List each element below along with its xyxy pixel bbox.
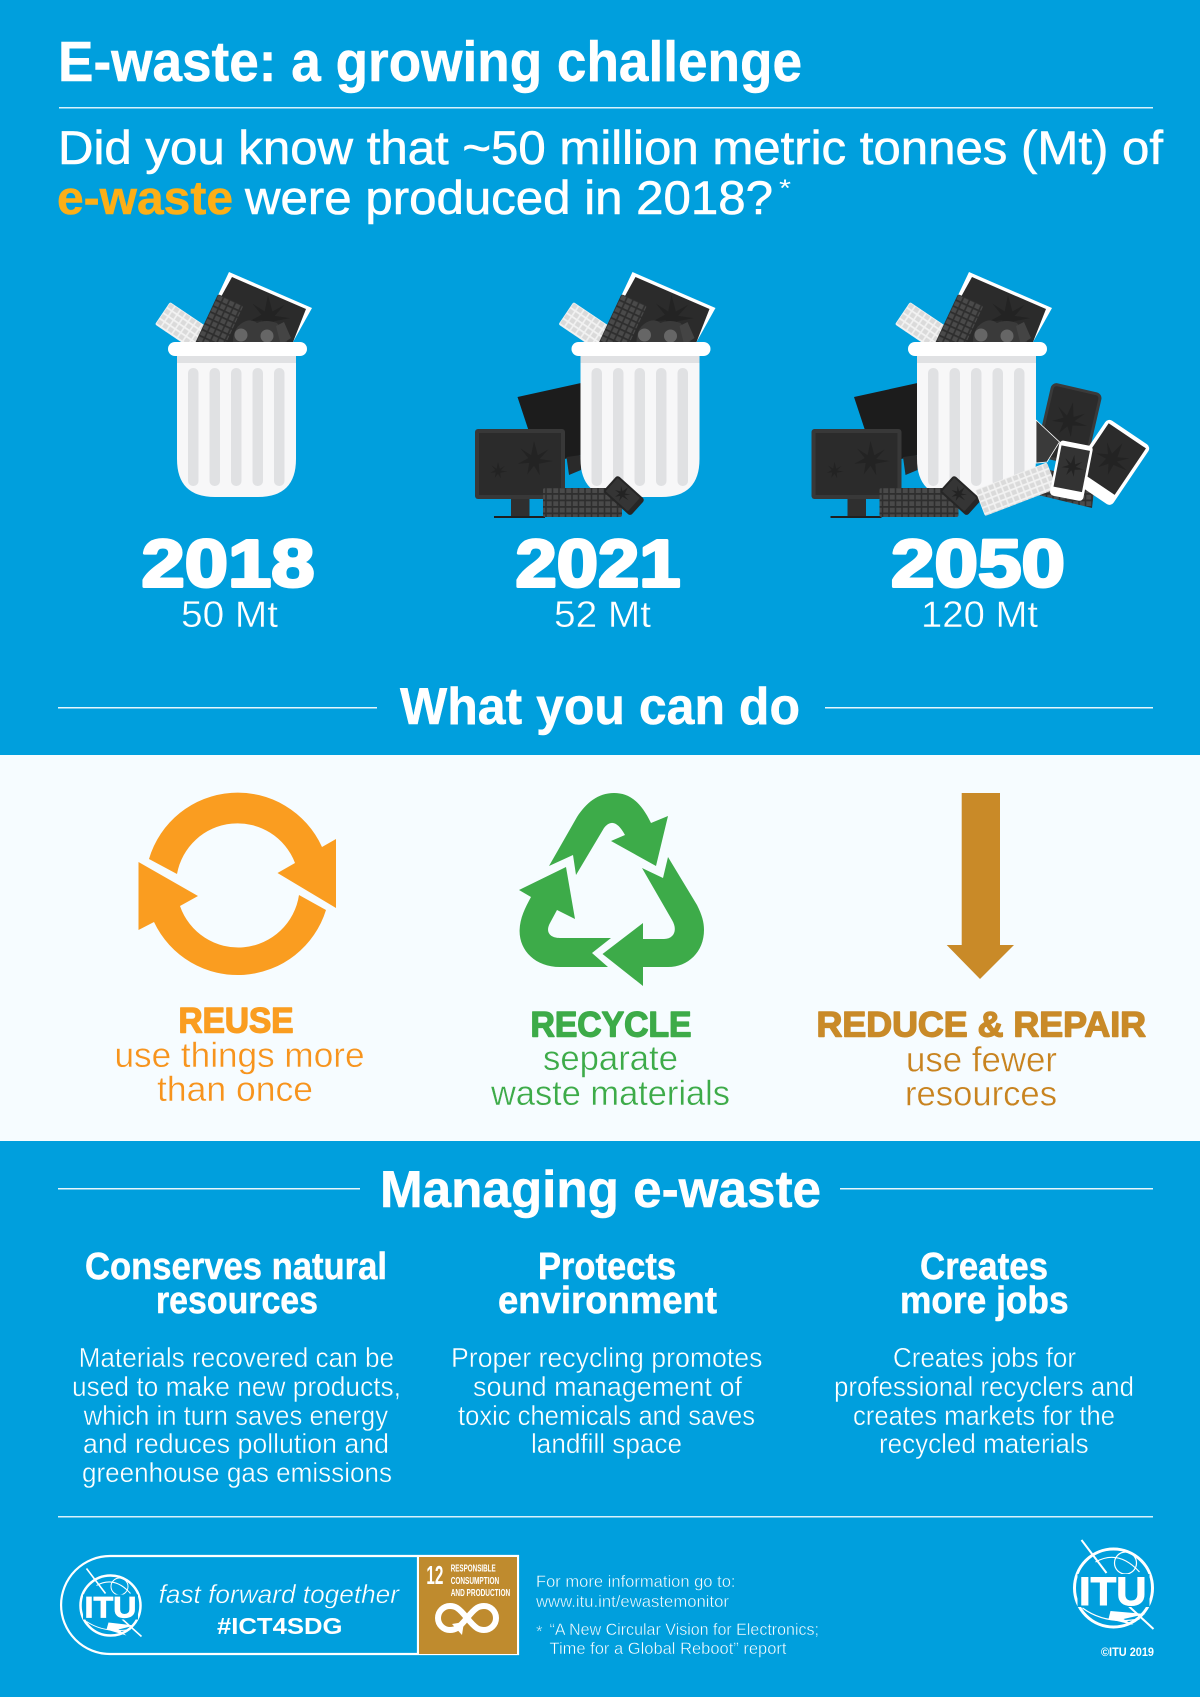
reduce and repair label: REDUCE & REPAIR	[816, 1006, 1146, 1044]
column text	[451, 1342, 762, 1459]
column text: recycled materials	[879, 1428, 1089, 1459]
reduce and repair description: resources	[905, 1074, 1057, 1114]
column text	[834, 1342, 1134, 1459]
icon: white keyboard	[975, 462, 1057, 516]
column text: toxic chemicals and saves	[458, 1400, 755, 1431]
SDG 12 square: 12	[426, 1560, 443, 1590]
SDG 12 square: RESPONSIBLE	[451, 1563, 496, 1575]
icon: trash bin 2018	[155, 272, 312, 497]
column heading	[900, 1246, 1069, 1322]
panel: actions band	[0, 755, 1200, 1141]
column text: landfill space	[531, 1428, 682, 1459]
year 2018: 2018	[142, 526, 314, 602]
recycle description: waste materials	[490, 1074, 730, 1113]
SDG 12 square: CONSUMPTION	[451, 1575, 499, 1587]
copyright: ©ITU 2019	[1101, 1647, 1154, 1659]
column text: which in turn saves energy	[83, 1400, 388, 1431]
icon: small tablet	[1036, 420, 1060, 463]
icon: white phone	[1049, 440, 1093, 501]
icon: ITU logo small: ITU	[84, 1592, 136, 1624]
footer badge	[61, 1556, 518, 1654]
panel: 2018	[142, 272, 314, 635]
reuse label: REUSE	[178, 1002, 294, 1040]
icon: white tablet	[1068, 418, 1151, 507]
title: E-waste: a growing challenge	[58, 30, 802, 94]
subtitle	[57, 121, 1164, 224]
icon: ITU logo small	[80, 1568, 142, 1636]
column text: professional recyclers and	[834, 1371, 1134, 1402]
subtitle: *	[779, 175, 791, 202]
subtitle: Did you know that ~50 million metric tonnes (Mt) of	[58, 121, 1164, 174]
more information text	[535, 1572, 736, 1611]
hashtag: #ICT4SDG	[217, 1613, 342, 1639]
value 50 Mt: 50 Mt	[181, 594, 279, 635]
more information text: For more information go to:	[536, 1572, 736, 1591]
footnote: *	[536, 1622, 543, 1641]
column heading	[498, 1246, 717, 1322]
column text: and reduces pollution and	[83, 1428, 389, 1459]
heading: managing e-waste: Managing e-waste	[380, 1161, 821, 1219]
reduce and repair description	[905, 1040, 1057, 1114]
icon: ITU logo large	[1074, 1540, 1154, 1629]
footnote: “A New Circular Vision for Electronics;	[550, 1620, 819, 1639]
icon: overflowing trash bin 2050	[812, 272, 1151, 518]
column heading	[85, 1246, 387, 1322]
panel: reduce and repair	[816, 793, 1146, 1114]
value 120 Mt: 120 Mt	[921, 594, 1039, 635]
icon: trash bin with e-waste pile 2021	[475, 272, 716, 518]
column heading: environment	[498, 1280, 717, 1322]
slogan: fast forward together	[159, 1579, 400, 1609]
footnote: Time for a Global Reboot” report	[550, 1639, 787, 1658]
column text: creates markets for the	[853, 1400, 1115, 1431]
reuse description	[114, 1036, 364, 1109]
footnote	[536, 1620, 819, 1658]
reuse description: than once	[157, 1070, 313, 1109]
column text: Creates jobs for	[893, 1342, 1076, 1373]
more information text: www.itu.int/ewastemonitor	[535, 1592, 729, 1611]
column: creates more jobs	[834, 1246, 1134, 1459]
reuse description: use things more	[114, 1036, 364, 1075]
SDG 12 square: AND PRODUCTION	[451, 1587, 510, 1599]
icon: down arrow	[947, 793, 1014, 979]
recycle description	[490, 1039, 730, 1113]
column text: sound management of	[473, 1371, 742, 1402]
column heading: Protects	[538, 1246, 676, 1288]
column heading: Conserves natural	[85, 1246, 387, 1288]
column text: used to make new products,	[72, 1371, 401, 1402]
panel: recycle	[490, 793, 730, 1113]
column text: greenhouse gas emissions	[82, 1457, 392, 1488]
value 52 Mt: 52 Mt	[554, 594, 652, 635]
subtitle: were produced in 2018?	[244, 171, 773, 224]
column text: Materials recovered can be	[79, 1342, 394, 1373]
icon: reuse arrows	[138, 793, 336, 975]
recycle description: separate	[543, 1039, 678, 1078]
column heading: more jobs	[900, 1280, 1069, 1322]
column heading: Creates	[920, 1246, 1048, 1288]
year 2050: 2050	[891, 526, 1065, 602]
icon: dark keyboard	[1038, 470, 1095, 508]
panel: 2050	[812, 272, 1151, 635]
year 2021: 2021	[516, 526, 680, 602]
recycle label: RECYCLE	[530, 1006, 692, 1044]
SDG 12 square	[419, 1557, 517, 1654]
column: conserves natural resources	[72, 1246, 401, 1488]
icon: recycle arrows	[519, 793, 704, 986]
subtitle: e-waste	[57, 171, 233, 224]
icon: dark tablet	[1035, 382, 1103, 468]
column text	[72, 1342, 401, 1488]
heading: what you can do: What you can do	[400, 678, 800, 736]
reduce and repair description: use fewer	[906, 1040, 1057, 1080]
column text: Proper recycling promotes	[451, 1342, 762, 1373]
column heading: resources	[156, 1280, 318, 1322]
panel: 2021	[475, 272, 716, 635]
column: protects environment	[451, 1246, 762, 1459]
icon: ITU logo large: ITU	[1079, 1570, 1146, 1614]
panel: reuse	[114, 793, 364, 1109]
